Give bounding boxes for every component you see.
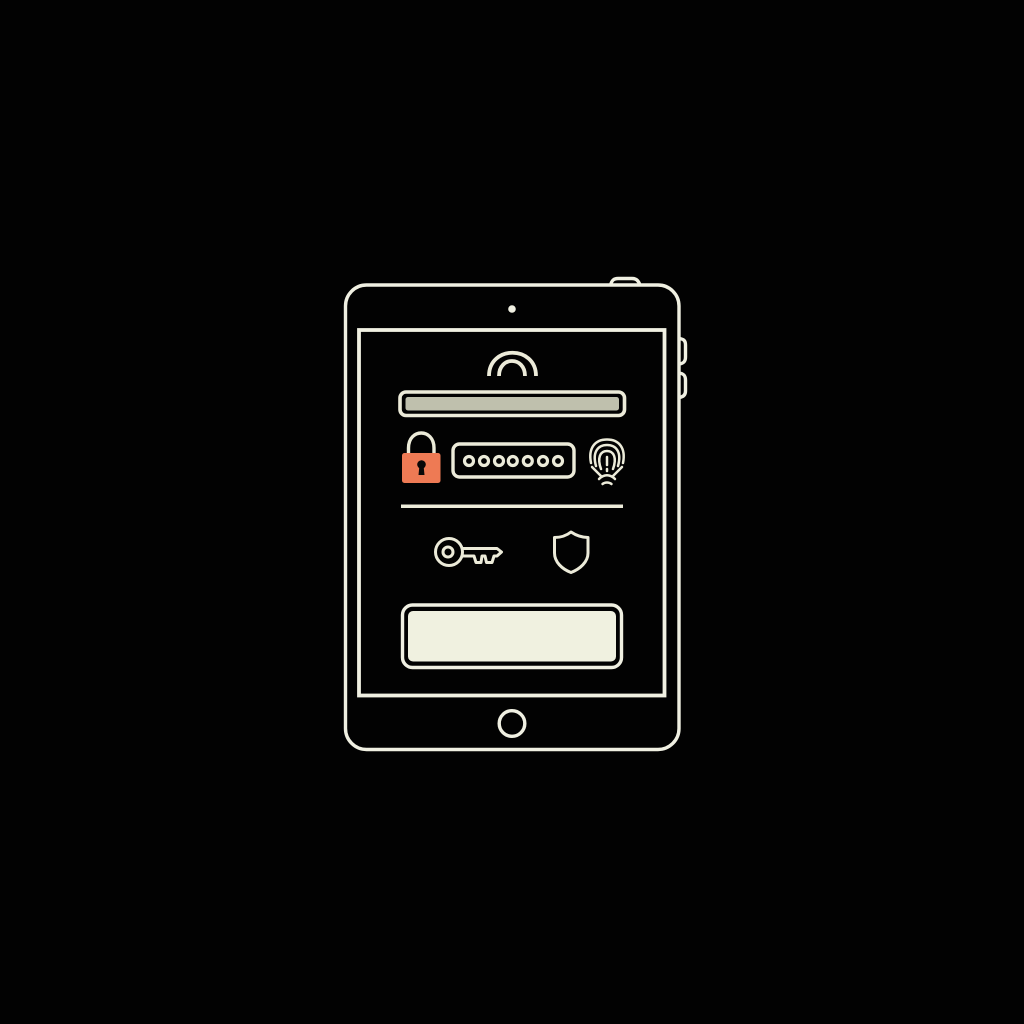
- password field: [453, 444, 574, 477]
- icon: key: [436, 538, 502, 566]
- side volume button lower: [679, 373, 686, 398]
- icon: shield: [554, 532, 588, 572]
- top power button: [610, 278, 640, 285]
- icon: fingerprint: [590, 440, 624, 484]
- icon: arc signal: [489, 353, 536, 376]
- screen frame: [359, 330, 664, 696]
- tablet body: [346, 285, 679, 750]
- side volume button upper: [679, 338, 686, 364]
- username field: [400, 392, 624, 416]
- tablet device: [346, 278, 686, 750]
- home button: [499, 711, 525, 736]
- password dots: [464, 456, 562, 466]
- divider line: [401, 504, 623, 508]
- front camera: [508, 305, 516, 313]
- icon: orange padlock: [402, 433, 440, 483]
- login button: [402, 605, 622, 668]
